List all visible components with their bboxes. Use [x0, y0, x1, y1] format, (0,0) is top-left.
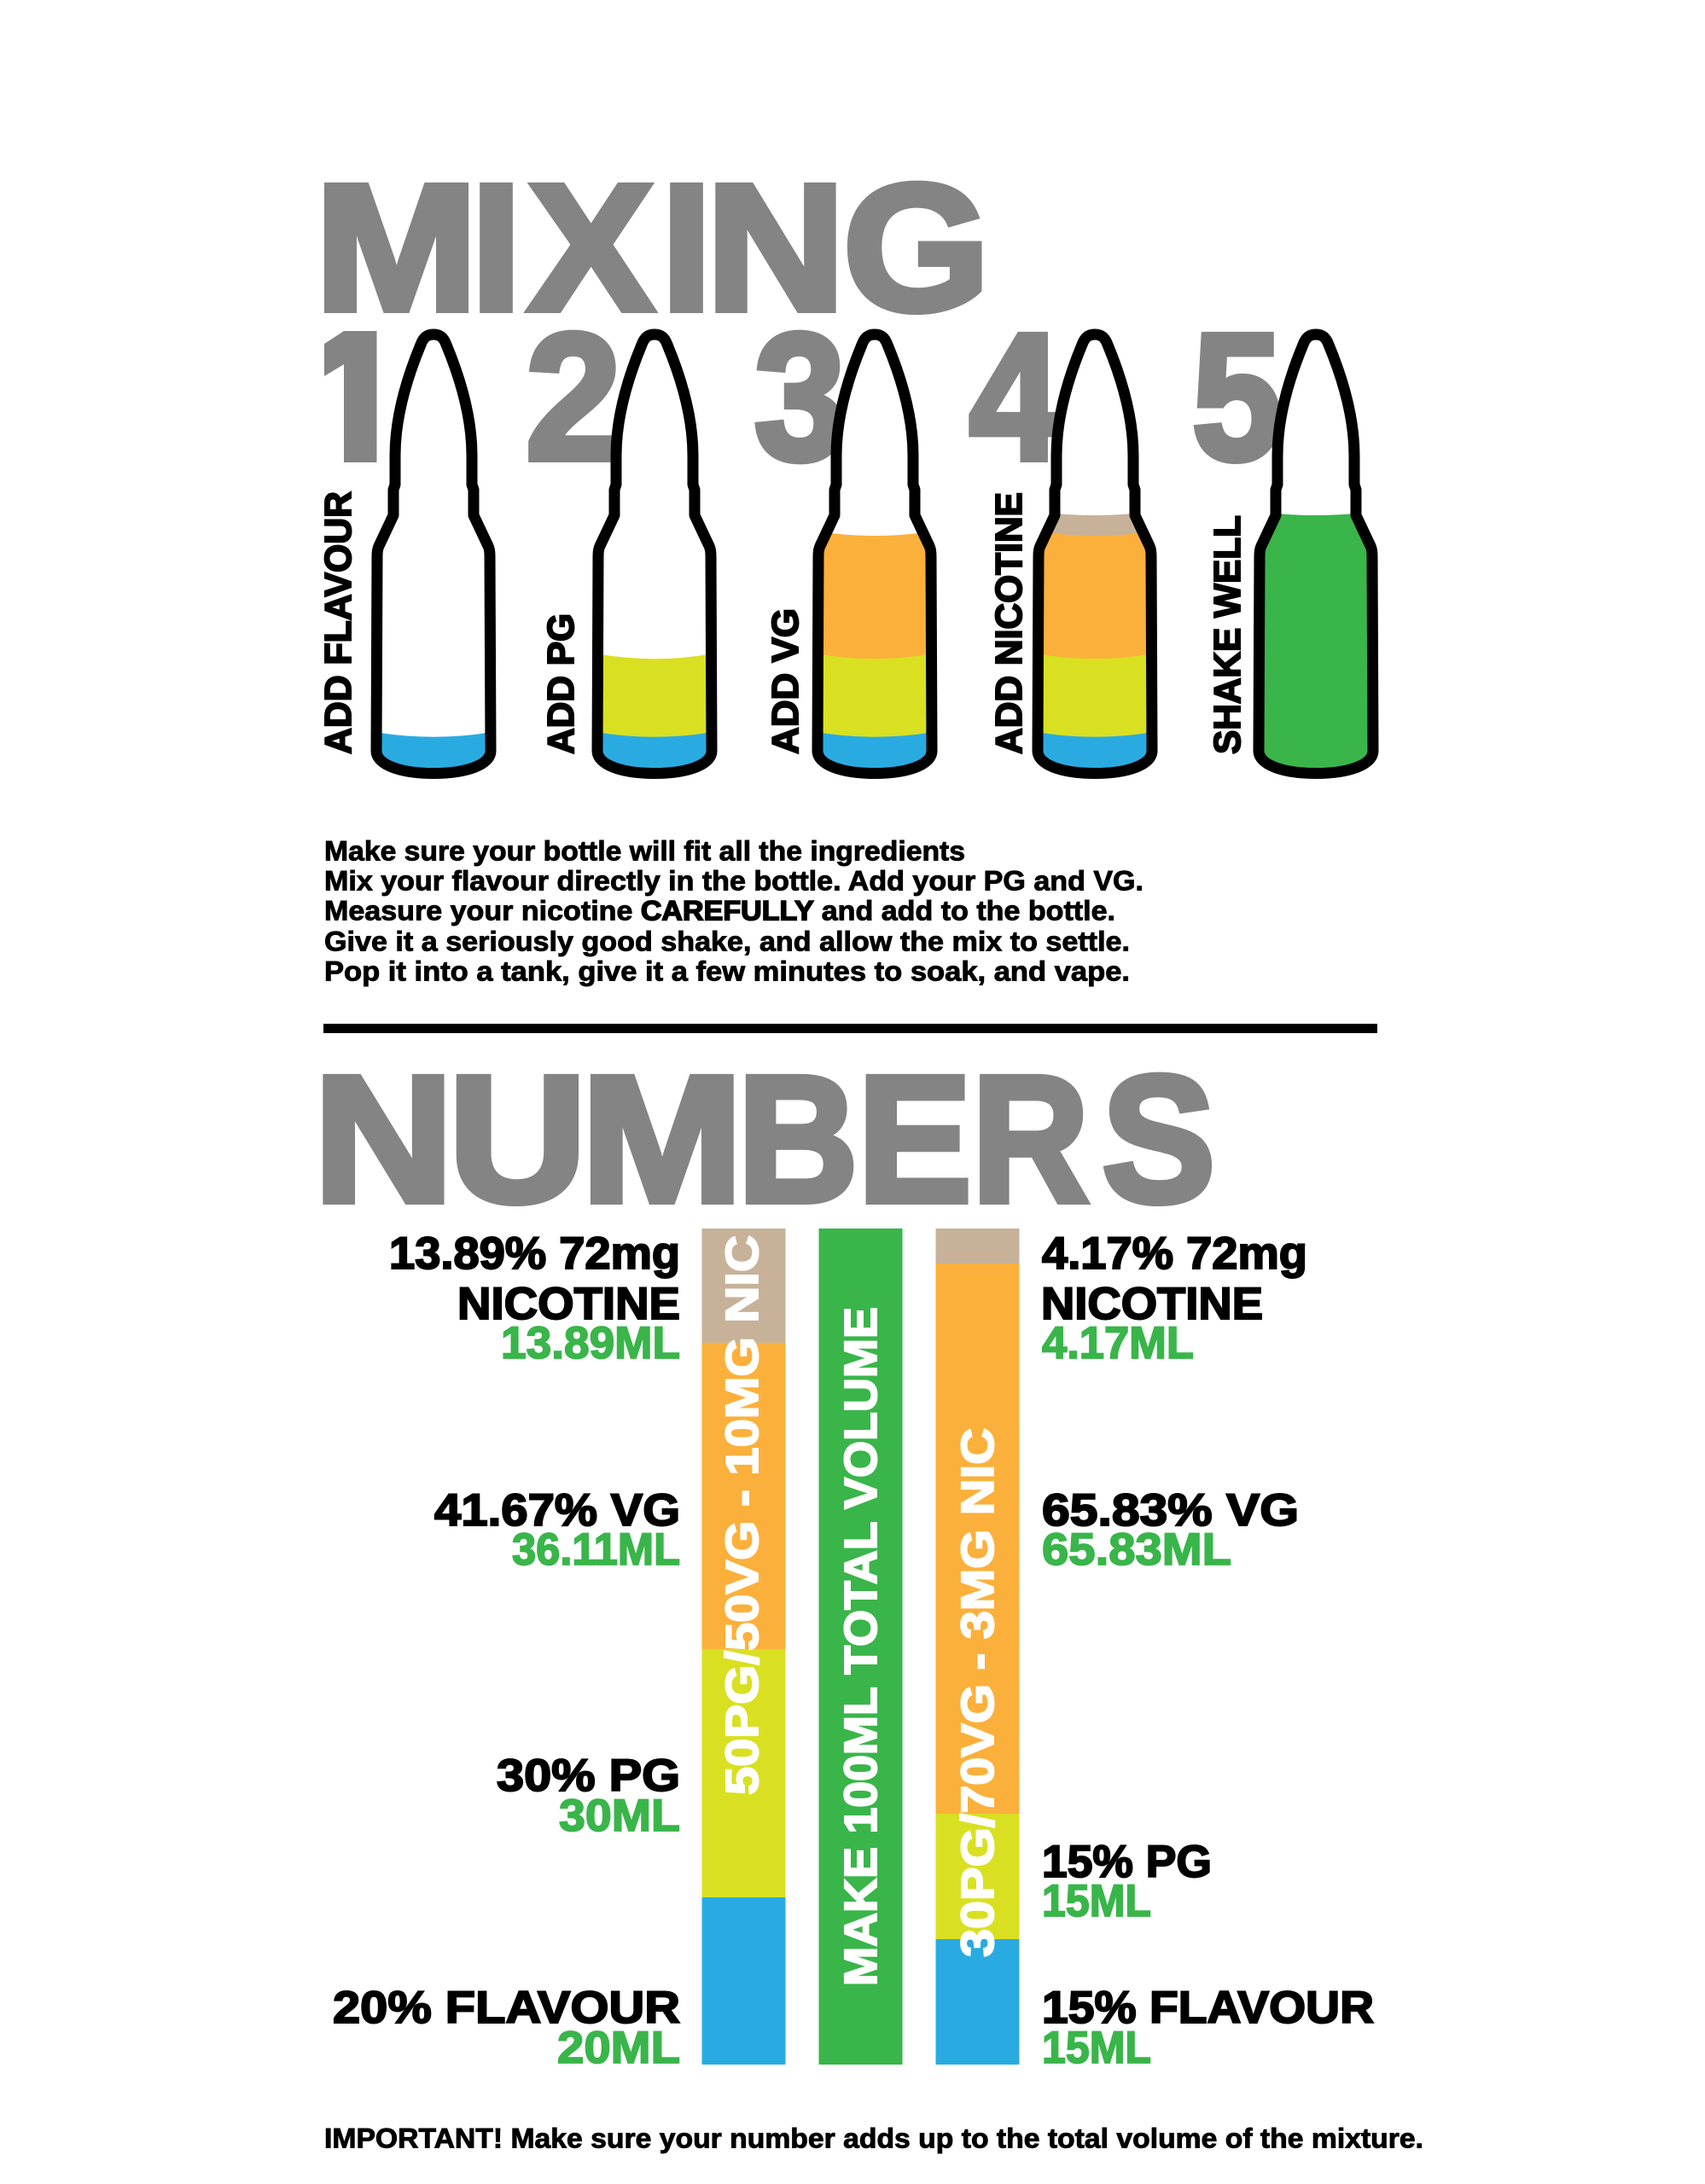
- instructions text block: Pop it into a tank, give it a few minutes to soak, and vape.: [324, 956, 1130, 986]
- step number 3: 3: [754, 296, 846, 497]
- right labels: flavour: [1042, 1983, 1374, 2073]
- left labels: nicotine: NICOTINE: [457, 1279, 680, 1329]
- right labels: flavour: 15% FLAVOUR: [1042, 1983, 1374, 2033]
- bottle 3: flavour, PG and VG: [806, 334, 943, 785]
- title: NUMBERS: N: [314, 1038, 454, 1240]
- right labels: nicotine: 4.17ML: [1042, 1318, 1194, 1368]
- left labels: PG: [497, 1751, 680, 1841]
- text: 1: [342, 298, 376, 499]
- left labels: nicotine: 13.89ML: [501, 1318, 680, 1368]
- bar: make 100ml total volume: [819, 1228, 903, 2065]
- right labels: nicotine: NICOTINE: [1041, 1279, 1263, 1329]
- bottle 2: flavour and PG: [586, 334, 723, 785]
- left labels: flavour: 20ML: [557, 2023, 680, 2073]
- left labels: PG: 30ML: [559, 1791, 680, 1841]
- step label: add flavour: ADD FLAVOUR: [317, 491, 359, 754]
- left labels: VG: [434, 1485, 680, 1575]
- bar: make 100ml total volume: MAKE 100ML TOTAL VOLUME: [835, 1307, 887, 1986]
- right labels: PG: 15% PG: [1042, 1837, 1212, 1887]
- title: NUMBERS: [314, 1038, 1215, 1240]
- step label: add PG: ADD PG: [540, 613, 582, 754]
- left labels: PG: 30% PG: [497, 1751, 680, 1801]
- step number 4: 4: [969, 296, 1061, 497]
- title: NUMBERS: R: [972, 1038, 1089, 1240]
- bottle 5: shaken green mix: [1248, 334, 1384, 785]
- title: MIXING: N: [707, 147, 845, 348]
- step number 5: 5: [1192, 296, 1282, 497]
- instructions text block: Make sure your bottle will fit all the ingredients: [324, 836, 965, 867]
- title: NUMBERS: M: [581, 1038, 743, 1240]
- title: MIXING: I: [661, 147, 712, 348]
- left labels: VG: 36.11ML: [512, 1525, 680, 1575]
- bar: 30PG/70VG 3mg nic: 30PG/70VG - 3MG NIC: [952, 1428, 1004, 1957]
- left labels: flavour: [333, 1983, 680, 2073]
- bottle 4: flavour, PG, VG and nicotine: [1027, 334, 1163, 785]
- footer note: IMPORTANT! Make sure your number adds up to the total volume of the mixture.: [324, 2123, 1423, 2153]
- left labels: VG: 41.67% VG: [434, 1485, 680, 1536]
- step number 2: 2: [526, 296, 621, 497]
- right labels: flavour: 15ML: [1042, 2023, 1151, 2073]
- title: MIXING: [315, 147, 990, 348]
- right labels: VG: 65.83% VG: [1042, 1485, 1299, 1536]
- title: MIXING: G: [843, 147, 990, 348]
- right labels: PG: 15ML: [1042, 1876, 1151, 1926]
- left labels: flavour: 20% FLAVOUR: [333, 1983, 680, 2033]
- title: NUMBERS: U: [449, 1038, 587, 1240]
- instructions text block: Give it a seriously good shake, and allow the mix to settle.: [324, 926, 1130, 957]
- step label: add VG: ADD VG: [765, 608, 806, 754]
- title: MIXING: M: [315, 147, 478, 348]
- title: NUMBERS: E: [858, 1038, 972, 1240]
- right labels: VG: 65.83ML: [1042, 1525, 1231, 1575]
- left labels: nicotine: [389, 1228, 680, 1368]
- title: MIXING: X: [528, 147, 654, 348]
- instructions text block: Measure your nicotine CAREFULLY and add to the bottle.: [324, 896, 1115, 926]
- right labels: nicotine: [1041, 1228, 1307, 1368]
- step number 1: [324, 298, 377, 499]
- title: NUMBERS: B: [737, 1038, 858, 1240]
- step label: shake well: SHAKE WELL: [1207, 515, 1248, 754]
- bar: 50PG/50VG 10mg nic: [701, 1228, 785, 2065]
- title: MIXING: I: [471, 147, 521, 348]
- left labels: nicotine: 13.89% 72mg: [389, 1228, 680, 1279]
- title: NUMBERS: S: [1103, 1038, 1215, 1240]
- step label: add nicotine: ADD NICOTINE: [988, 492, 1030, 754]
- right labels: PG: [1042, 1837, 1212, 1926]
- bar: 30PG/70VG 3mg nic: [935, 1228, 1019, 2065]
- bar: 50PG/50VG 10mg nic: 50PG/50VG - 10MG NIC: [717, 1235, 768, 1795]
- bottle 1: flavour: [365, 334, 502, 785]
- right labels: nicotine: 4.17% 72mg: [1042, 1228, 1307, 1279]
- right labels: VG: [1042, 1485, 1299, 1575]
- instructions text block: Mix your flavour directly in the bottle. Add your PG and VG.: [324, 865, 1143, 896]
- instructions text block: [324, 836, 1143, 986]
